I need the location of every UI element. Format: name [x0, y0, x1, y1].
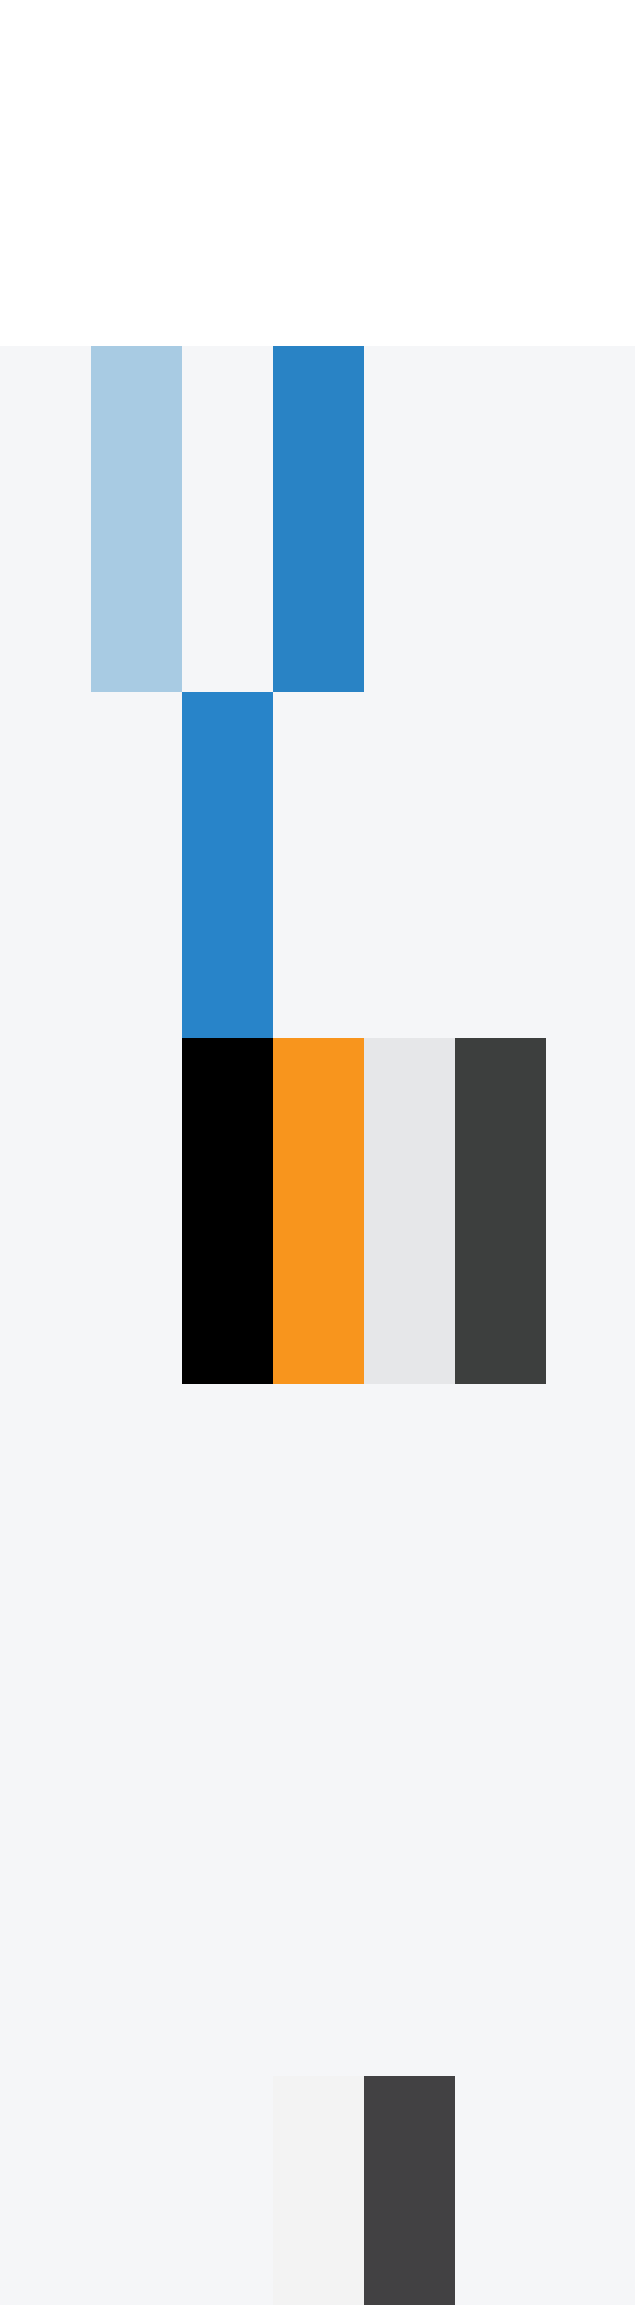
block: blue middle [182, 692, 273, 1038]
block: charcoal [455, 1038, 546, 1384]
block: orange [273, 1038, 364, 1384]
block: off-white bottom [273, 2076, 364, 2305]
block: light grey [364, 1038, 455, 1384]
block: light blue [91, 346, 182, 692]
block: dark grey bottom [364, 2076, 455, 2305]
block: black [182, 1038, 273, 1384]
block: blue top right [273, 346, 364, 692]
